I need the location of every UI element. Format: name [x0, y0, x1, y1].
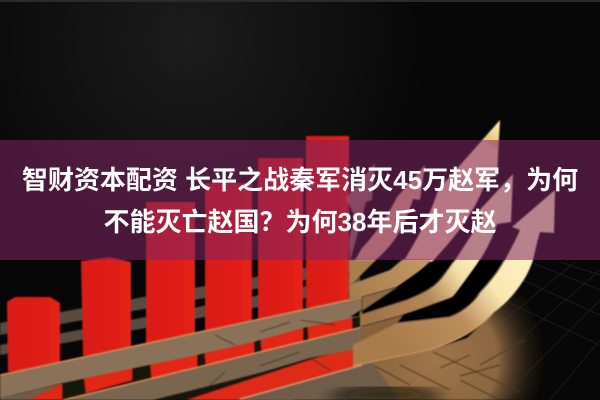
back rails behind bars — [0, 258, 360, 355]
ground shadow — [325, 388, 447, 400]
floor with red reflections — [0, 297, 362, 400]
bar chart: six red bars — [7, 136, 349, 372]
arrow 4 — [350, 174, 513, 327]
title line 2: 不能灭亡赵国？为何38年后才灭赵 — [104, 207, 496, 237]
title line 1: 智财资本配资 长平之战秦军消灭45万赵军，为何 — [22, 165, 578, 195]
top edge highlight — [0, 0, 600, 2]
floor grid at right — [420, 262, 600, 400]
arrow 2 — [349, 165, 425, 284]
arrow 1: small far arrow — [346, 163, 375, 262]
tiled floor in front — [236, 287, 600, 400]
plank strips — [0, 297, 362, 400]
arrow 5: front arrow — [353, 190, 555, 366]
title banner — [0, 140, 600, 260]
arrow 3: tallest arrow — [349, 120, 500, 300]
